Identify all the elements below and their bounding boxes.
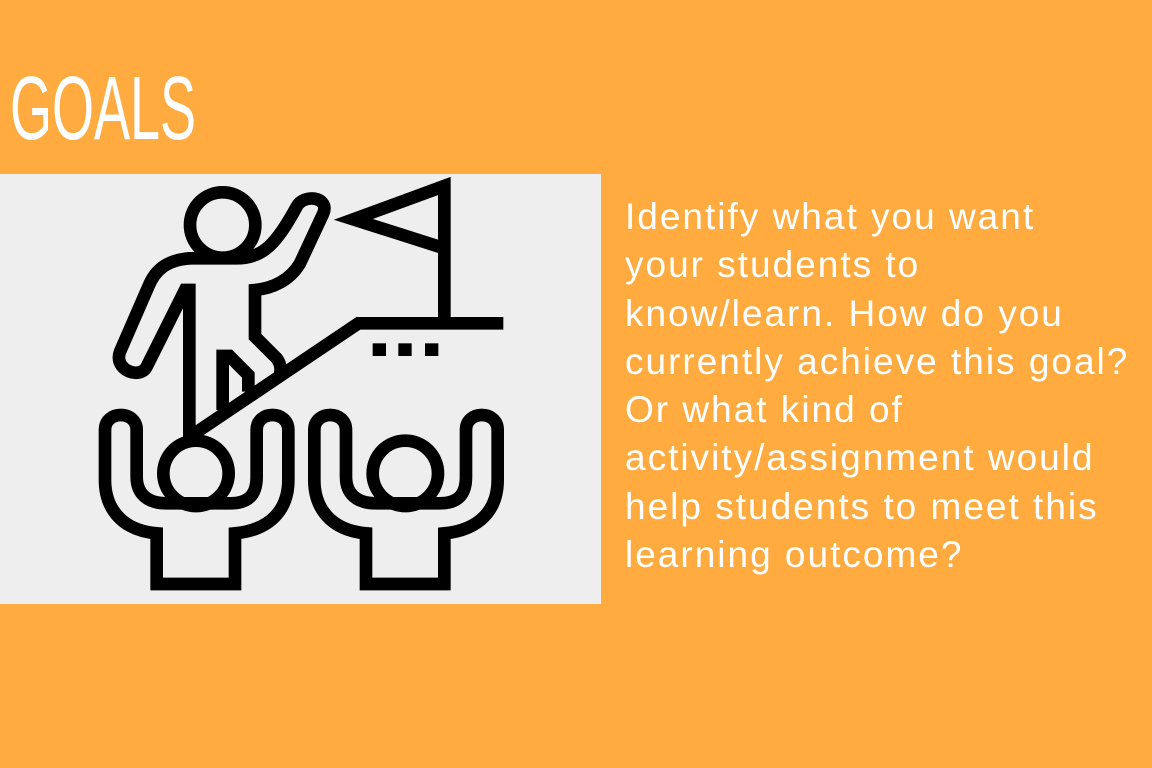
dots	[373, 343, 438, 356]
text block: description: Identify what you want	[625, 196, 1035, 237]
text block: description: learning outcome?	[625, 534, 963, 575]
supporter right	[314, 415, 498, 584]
title: GOALS	[10, 59, 196, 159]
text block: description: Or what kind of	[625, 389, 904, 430]
text block: description	[625, 196, 1129, 575]
flag	[353, 186, 444, 323]
text block: description: help students to meet this	[625, 486, 1099, 527]
climber	[119, 192, 324, 437]
ledge and slope	[190, 323, 503, 437]
text block: description: activity/assignment would	[625, 437, 1095, 478]
supporter left	[105, 415, 288, 584]
icon: climber reaching flag with supporters	[105, 186, 503, 584]
text block: description: currently achieve this goal?	[625, 341, 1129, 382]
text block: description: your students to	[625, 244, 920, 285]
text block: description: know/learn. How do you	[625, 293, 1064, 334]
panel: illustration	[0, 174, 601, 604]
